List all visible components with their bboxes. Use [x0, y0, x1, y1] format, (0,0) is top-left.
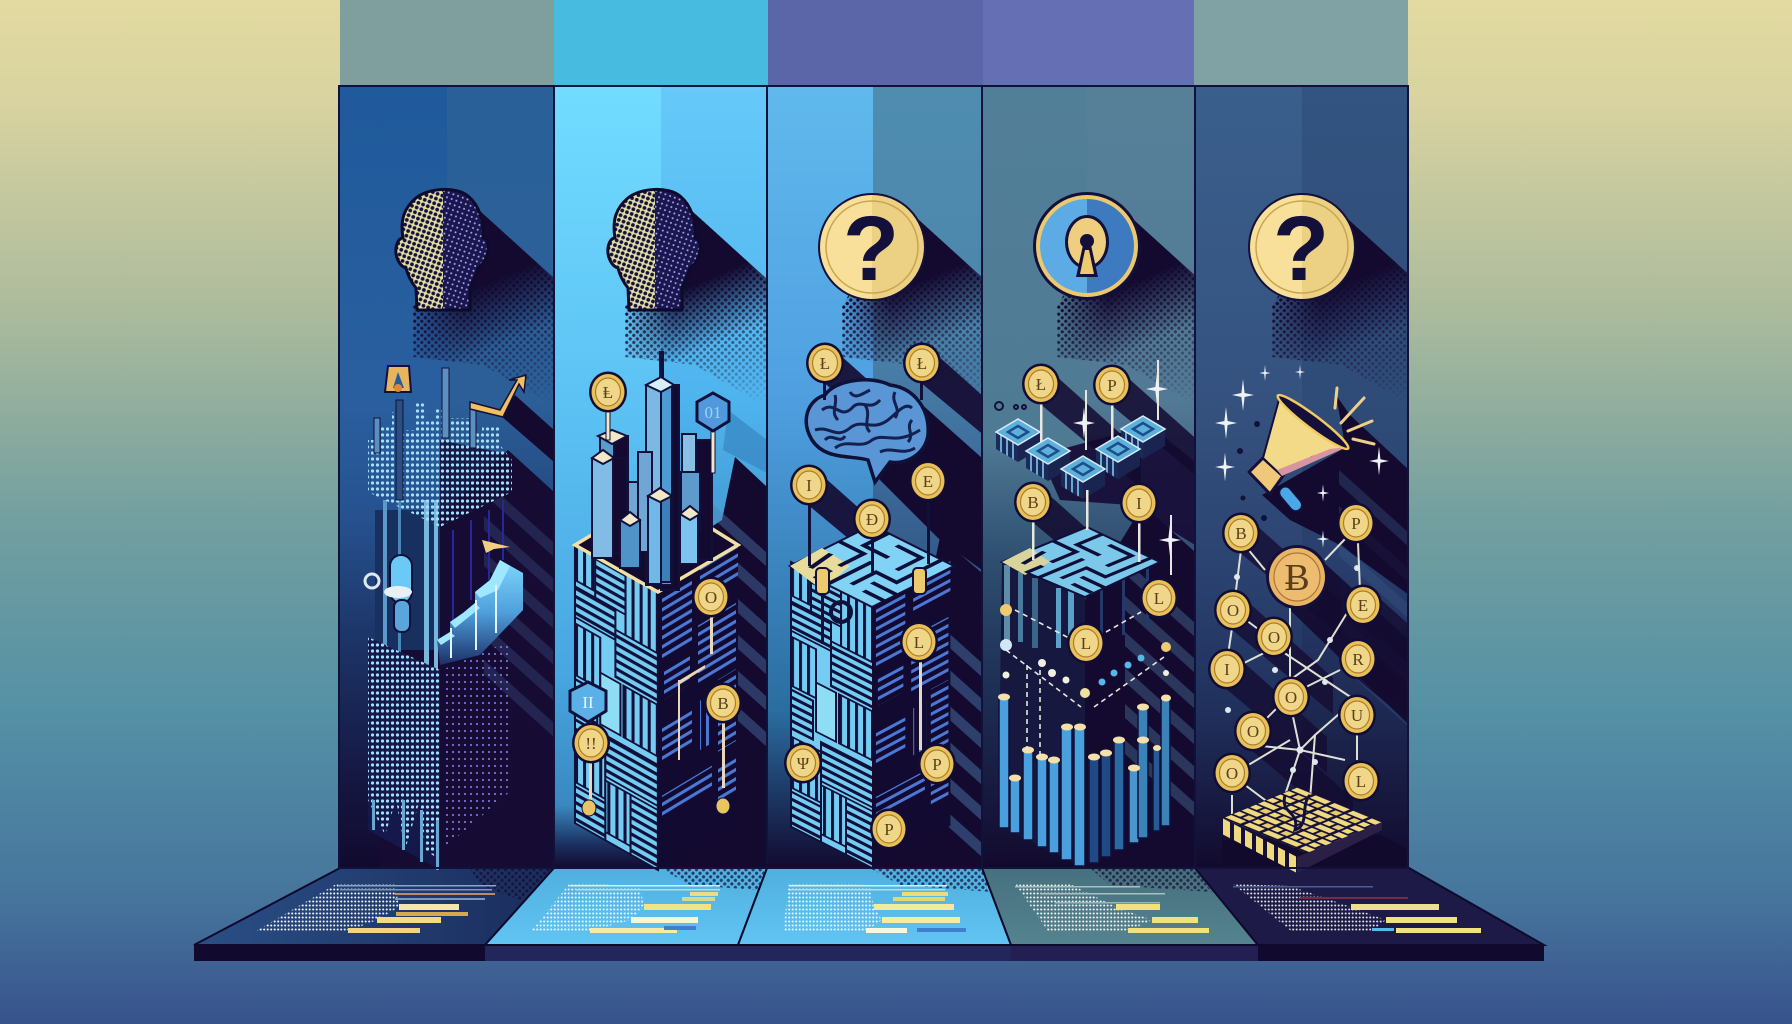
tower shadow [686, 457, 766, 854]
big coin shadow [1290, 550, 1409, 725]
floor slab 4 [982, 868, 1258, 945]
network coins: I [1224, 660, 1230, 679]
panel 1 background [340, 87, 554, 868]
megaphone rays [1335, 388, 1374, 444]
dotted lower curtain: right face [442, 640, 512, 850]
question coin panel 5: ? [1273, 198, 1329, 300]
shadow bands [1125, 560, 1195, 817]
coins: P [884, 820, 894, 839]
floor slab 3 [738, 868, 1011, 945]
shield with stem [697, 393, 729, 473]
stems [808, 380, 930, 750]
coins: Ψ [797, 754, 810, 773]
coin with stem [589, 372, 627, 440]
coins: Ð [866, 510, 878, 529]
tower left face [575, 545, 658, 870]
network coins: O [1227, 601, 1239, 620]
network coins: O [1247, 722, 1259, 741]
cube right face [872, 561, 950, 868]
triangle alert icon [385, 366, 411, 392]
network coins: U [1351, 706, 1363, 725]
network coins: L [1356, 772, 1366, 791]
shield with stem: 01 [704, 403, 722, 422]
coins: L [914, 633, 924, 652]
cube left face [791, 562, 873, 868]
panel 5 background [1196, 87, 1408, 868]
center front tower [648, 488, 672, 584]
shadow bands [713, 504, 766, 746]
block left face [998, 562, 1085, 868]
data core stripes [375, 500, 504, 670]
shadow bands [912, 600, 982, 857]
antenna poles [374, 368, 476, 500]
ray and megaphone shadows [1262, 395, 1409, 595]
block maze top [1002, 527, 1163, 598]
dashed trend lines and dots [1000, 604, 1171, 757]
tower coins: O [705, 588, 717, 607]
network lines [1228, 538, 1360, 815]
figure icon [365, 555, 412, 632]
network coins: P [1351, 514, 1361, 533]
small circle marks [995, 402, 1026, 410]
question icon shadow [1272, 202, 1414, 407]
tower coins [570, 576, 742, 816]
small dots [1237, 421, 1267, 521]
tower shadow [1085, 505, 1195, 868]
pins and gear [816, 568, 926, 644]
megaphone [1249, 390, 1352, 513]
network coins [1208, 502, 1382, 802]
panel 2: skyline tower [555, 87, 767, 870]
stems [1032, 360, 1172, 575]
skyline buildings [592, 352, 712, 590]
big coin: Ƀ [1284, 557, 1310, 599]
front left tower [592, 450, 627, 558]
coins: P [932, 755, 942, 774]
shadow bands [484, 480, 554, 737]
network coins: O [1285, 688, 1297, 707]
sparkles [1215, 365, 1389, 548]
panel 5: megaphone and coin network [1196, 87, 1463, 873]
panel 4 background [983, 87, 1195, 868]
growth arrow [470, 375, 526, 417]
band fades on shadow [1339, 470, 1409, 727]
tower coins: II [582, 693, 594, 712]
floor platform with five text slabs [194, 868, 1544, 961]
question coin panel 3 [818, 193, 926, 301]
coins: I [806, 476, 812, 495]
panel divider lines and frame [339, 86, 1408, 868]
network coins: E [1358, 596, 1368, 615]
cube row shadow [1040, 425, 1195, 545]
dotted lower curtain: left face [368, 637, 440, 870]
network coins: R [1352, 650, 1364, 669]
coins [1014, 364, 1178, 664]
head long shadow [625, 202, 767, 407]
dark mass shadow [396, 450, 553, 808]
coin shadows [1025, 367, 1212, 606]
coins: E [923, 472, 933, 491]
coins: B [1027, 493, 1039, 512]
coins: Ł [1036, 375, 1046, 394]
coins: L [1081, 634, 1091, 653]
tower right face [658, 544, 738, 870]
keyhole coin panel 4 [1033, 192, 1141, 300]
small isometric cubes [996, 416, 1165, 499]
brain shadow [880, 385, 981, 570]
coins: Ł [917, 354, 927, 373]
back left tower [596, 428, 630, 481]
network coins: B [1235, 524, 1247, 543]
tower coins: B [717, 694, 729, 713]
head icon panel 1 [390, 185, 493, 315]
coin with stem: Ⱡ [603, 383, 613, 402]
coins: L [1154, 589, 1164, 608]
panel 3 background [768, 87, 982, 868]
floor slab 2 [485, 868, 767, 945]
network coins: O [1226, 764, 1238, 783]
coins: Ł [820, 354, 830, 373]
block top stripes [1004, 565, 1149, 650]
tall tower [646, 352, 679, 590]
bar chart [998, 694, 1171, 866]
dotted upper data block [368, 402, 512, 527]
arrow shadow [500, 395, 554, 462]
keyhole icon shadow [1057, 202, 1199, 407]
floor front edge [194, 945, 1544, 961]
sparkles [1073, 373, 1181, 556]
chip shadow [1222, 835, 1408, 868]
top colour bars [340, 0, 1408, 87]
light blue stairs [437, 540, 523, 665]
cube maze top [790, 525, 954, 607]
coin shadows [1219, 506, 1463, 835]
floor slab 5 [1195, 868, 1544, 945]
question icon shadow [842, 219, 981, 392]
head long shadow [413, 212, 553, 397]
tower top platform [572, 527, 742, 594]
head icon panel 2 [602, 185, 705, 315]
right towers [680, 434, 712, 564]
short tower [620, 452, 652, 568]
question coin panel 5 [1248, 193, 1356, 301]
coins: P [1107, 376, 1117, 395]
coins: I [1136, 494, 1142, 513]
question coin panel 3: ? [843, 198, 899, 300]
floor slab 1 [194, 868, 554, 945]
shield shadow [723, 410, 767, 473]
big coin [1266, 545, 1328, 609]
tower coins: !! [585, 734, 597, 753]
panel 2 background [555, 87, 767, 868]
gold chip [1222, 787, 1382, 873]
dark backing of upper data block [440, 440, 504, 516]
coin shadows [811, 358, 981, 537]
panel 4: keyhole and bar chart [983, 87, 1212, 868]
coins [784, 342, 956, 850]
network node dots [1225, 565, 1360, 773]
tower shadow [872, 537, 982, 868]
network coins: O [1268, 628, 1280, 647]
panel 1: data curtain [340, 87, 555, 870]
brain [806, 380, 928, 482]
panel 3: brain and circuit cube [768, 87, 981, 870]
